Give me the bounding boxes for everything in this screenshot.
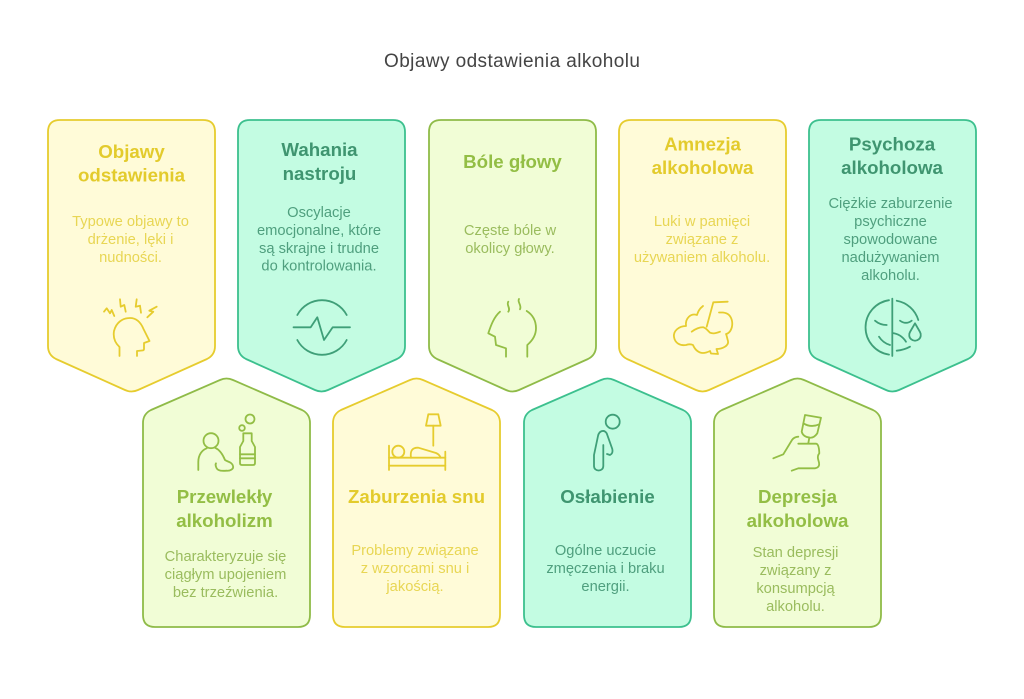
text block: Charakteryzuje się [165, 549, 286, 565]
text block: bez trzeźwienia. [173, 585, 278, 601]
heading: odstawienia [78, 164, 186, 186]
text block: są skrajne i trudne [259, 241, 379, 257]
heading: alkoholowa [841, 157, 943, 178]
heading: nastroju [283, 163, 356, 184]
heading: Osłabienie [560, 486, 655, 507]
panel: Osłabienie [524, 378, 691, 627]
text block: z wzorcami snu i [361, 561, 469, 577]
card shape [714, 378, 881, 627]
panel: Wahania nastroju [238, 120, 405, 392]
text block: związany z [760, 563, 831, 579]
panel: Przewlekły alkoholizm [143, 378, 310, 627]
text block: Problemy związane [351, 543, 479, 559]
text block: zmęczenia i braku [546, 561, 665, 577]
text block: używaniem alkoholu. [634, 250, 770, 266]
text block: związane z [666, 232, 738, 248]
text block: konsumpcją [756, 581, 836, 597]
panel: Objawy odstawienia [48, 120, 215, 392]
heading: Amnezja [664, 134, 742, 154]
icon: pulse in circle [294, 300, 350, 355]
panel: Psychoza alkoholowa [809, 120, 976, 392]
icon: bed and lamp [389, 414, 445, 470]
text block: Ciężkie zaburzenie [828, 196, 953, 212]
heading: Zaburzenia snu [348, 486, 485, 507]
card shape [48, 120, 215, 392]
text block [464, 223, 557, 257]
panel: Amnezja alkoholowa [619, 120, 786, 392]
heading: Objawy [98, 141, 165, 162]
card shape [524, 378, 691, 627]
heading: alkoholowa [747, 510, 849, 531]
text block: ciągłym upojeniem [165, 567, 286, 583]
heading: Depresja [758, 486, 838, 507]
text block [828, 196, 953, 284]
panel: Zaburzenia snu [333, 378, 500, 627]
text block: Ogólne uczucie [555, 543, 656, 559]
heading [176, 486, 273, 531]
icon: brain [674, 302, 732, 354]
text block [753, 545, 838, 615]
heading: alkoholowa [652, 157, 754, 178]
text block [257, 205, 381, 274]
heading [841, 134, 943, 178]
icon: aching head with steam [488, 299, 536, 357]
text block: Częste bóle w [464, 223, 557, 239]
icon: weakened person [594, 415, 620, 470]
icon: head with lightning bolts [104, 299, 157, 356]
card shape [333, 378, 500, 627]
text block: alkoholu. [861, 268, 920, 284]
heading: Bóle głowy [463, 151, 562, 172]
text block [634, 214, 770, 266]
text block: nadużywaniem [842, 250, 939, 266]
text block: do kontrolowania. [261, 258, 377, 274]
heading: Psychoza [849, 134, 936, 154]
text block: drżenie, lęki i [88, 232, 173, 248]
heading: alkoholizm [176, 510, 273, 531]
text block [546, 543, 665, 595]
card shape [429, 120, 596, 392]
text block: Typowe objawy to [72, 214, 189, 230]
text block: psychiczne [854, 214, 927, 230]
text block: spowodowane [844, 232, 937, 248]
text block [72, 214, 189, 266]
card shape [143, 378, 310, 627]
text block [165, 549, 286, 601]
text block [351, 543, 479, 595]
heading [281, 139, 358, 184]
text block: Stan depresji [753, 545, 838, 561]
panel: Bóle głowy [429, 120, 596, 392]
heading [652, 134, 754, 178]
text block: energii. [581, 579, 630, 595]
icon: hand holding glass [773, 415, 821, 471]
text block: nudności. [99, 250, 162, 266]
card shape [619, 120, 786, 392]
icon: person and bottle [198, 414, 255, 471]
text block: emocjonalne, które [257, 223, 381, 239]
text block: Luki w pamięci [654, 214, 750, 230]
text block: jakością. [385, 579, 444, 595]
heading: Wahania [281, 139, 358, 160]
card shape [809, 120, 976, 392]
text block: Oscylacje [287, 205, 351, 221]
text block: alkoholu. [766, 599, 825, 615]
heading: Przewlekły [177, 486, 273, 507]
card shape [238, 120, 405, 392]
heading [747, 486, 849, 531]
icon: two-sided face [866, 299, 921, 356]
heading [78, 141, 186, 186]
panel: Depresja alkoholowa [714, 378, 881, 627]
text block: okolicy głowy. [465, 241, 555, 257]
title: Objawy odstawienia alkoholu [384, 51, 640, 72]
